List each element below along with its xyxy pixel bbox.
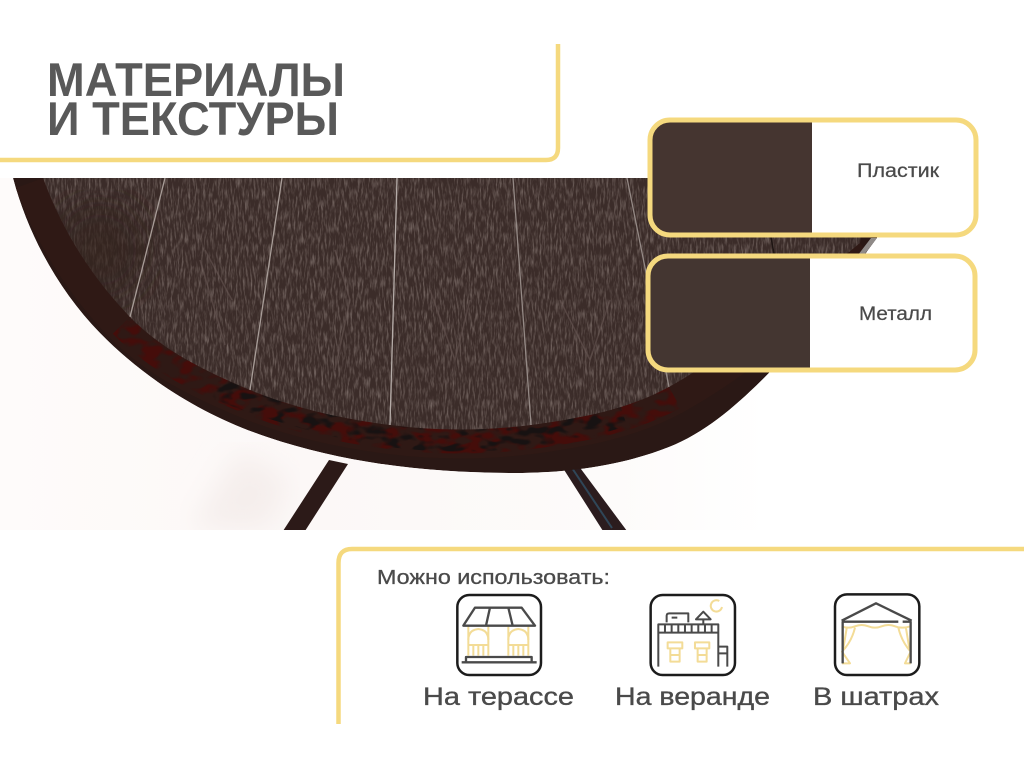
title: МАТЕРИАЛЫ [47, 53, 345, 106]
plastic swatch [650, 120, 812, 235]
title: И ТЕКСТУРЫ [47, 92, 339, 145]
title frame [0, 44, 558, 160]
label: terrace: На терассе [423, 683, 574, 711]
label: tents: В шатрах [813, 683, 940, 711]
title [47, 53, 345, 145]
icon: tent [835, 594, 919, 675]
table leg right [564, 468, 626, 530]
table leg left [283, 460, 348, 531]
usage heading: Можно использовать: [377, 566, 610, 589]
card: metal [648, 256, 975, 370]
card: plastic [650, 120, 976, 235]
label: veranda: На веранде [615, 683, 770, 711]
usage frame [338, 549, 1024, 724]
table planks with wood grain [40, 178, 880, 438]
icon: veranda [651, 595, 735, 675]
table edge tip [859, 238, 877, 254]
table rim [13, 178, 877, 473]
card: metal: Металл [859, 304, 932, 325]
icon: terrace [457, 595, 541, 675]
photo: round table top [13, 178, 877, 530]
card: plastic: Пластик [857, 161, 940, 182]
metal swatch [648, 256, 810, 370]
